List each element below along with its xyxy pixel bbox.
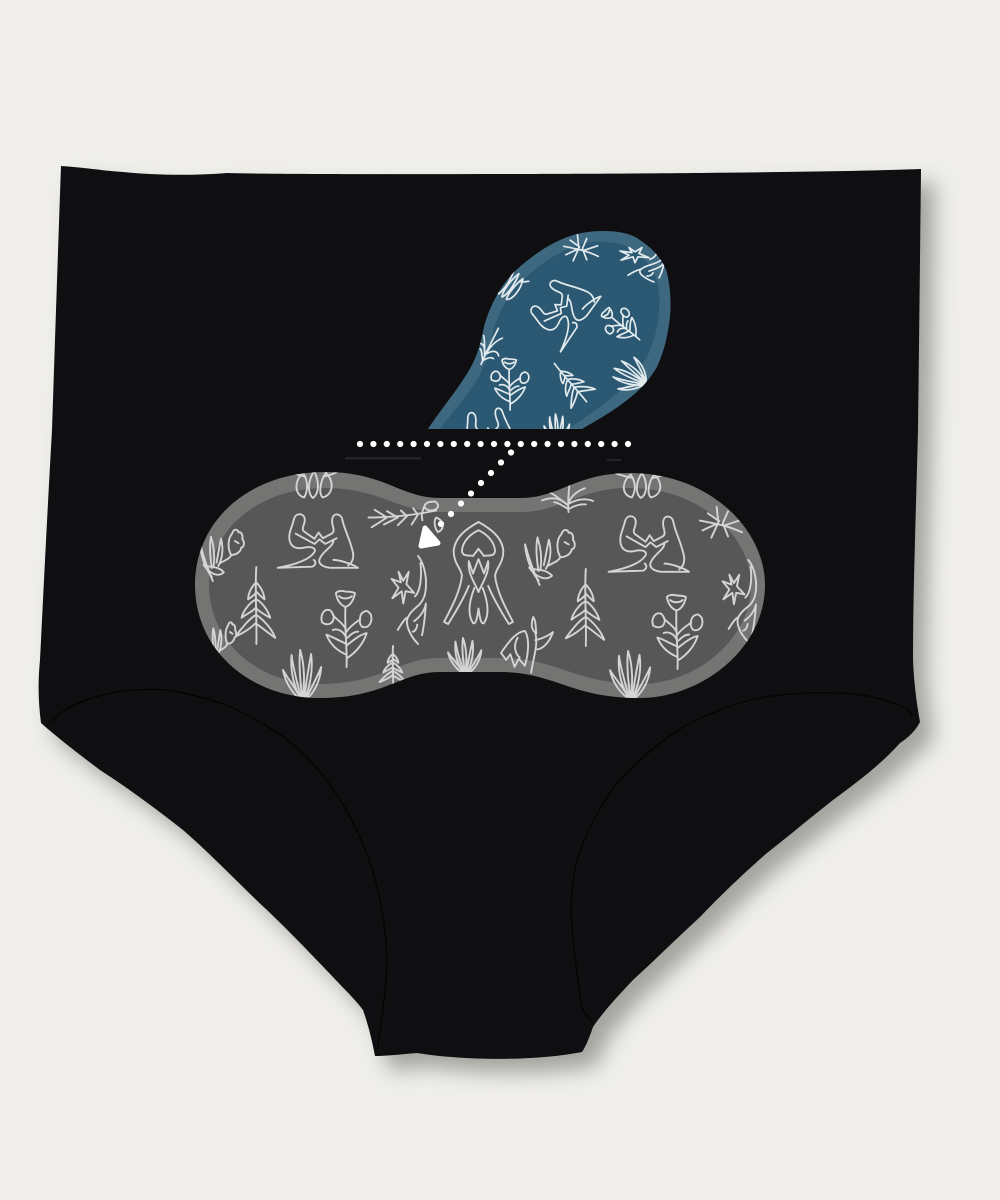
right leg seam bbox=[571, 693, 912, 1023]
grey pad centre bbox=[209, 488, 751, 684]
blue pad centre bbox=[440, 242, 659, 429]
dark slit marks bbox=[345, 457, 621, 461]
grey pad rim bbox=[195, 472, 765, 698]
garment body bbox=[39, 166, 921, 1059]
grey pad motifs bbox=[200, 471, 756, 700]
dotted placement arrow bbox=[357, 441, 631, 546]
horizontal dotted line bbox=[357, 441, 631, 447]
left leg seam bbox=[52, 689, 387, 1050]
blue pad motifs bbox=[466, 234, 664, 429]
blue pad rim bbox=[428, 231, 671, 429]
illustration: underwear with pad placement bbox=[38, 166, 948, 1086]
underwear shadow bbox=[53, 180, 935, 1073]
blue pad folded up bbox=[428, 231, 671, 429]
arrowhead bbox=[421, 528, 438, 546]
diagonal dotted line bbox=[438, 449, 514, 527]
underwear garment bbox=[39, 166, 921, 1059]
grey pad flat bbox=[195, 471, 765, 700]
